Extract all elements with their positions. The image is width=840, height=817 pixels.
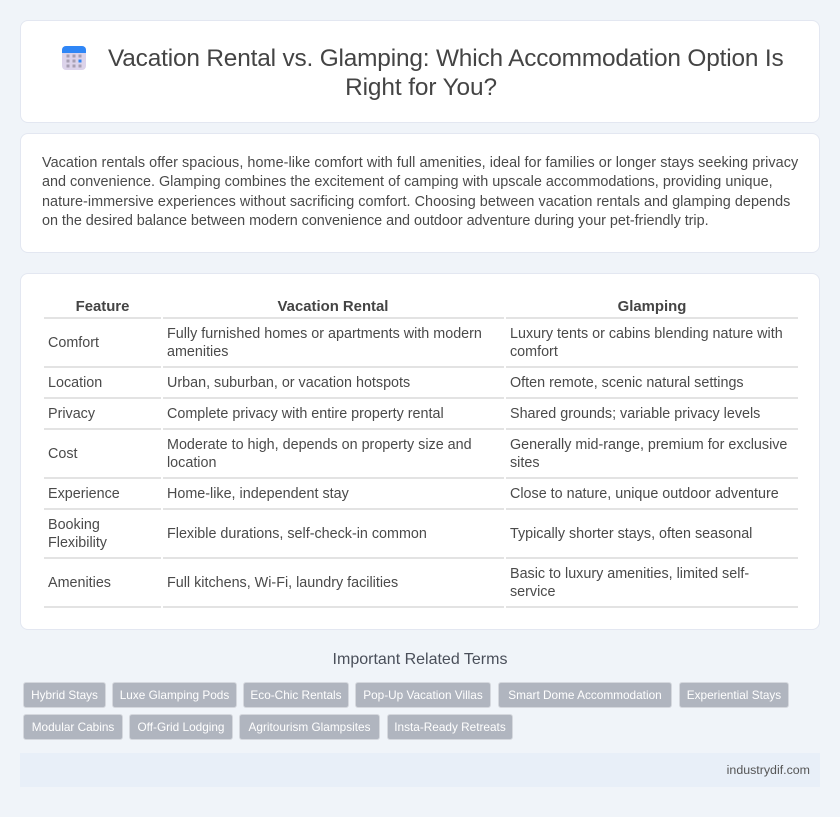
row: location: Location — [48, 374, 102, 390]
row: amenities: Basic to luxury amenities, limited self- — [510, 566, 749, 582]
row: amenities: Full kitchens, Wi-Fi, laundry facilities — [167, 574, 398, 590]
row: booking flexibility: Typically shorter stays, often seasonal — [510, 526, 752, 542]
table header row: Glamping — [618, 299, 686, 315]
tags: related terms: Off-Grid Lodging — [138, 720, 224, 734]
panel: title header — [20, 20, 820, 123]
table header row: Feature — [76, 299, 129, 315]
tags: related terms: Pop-Up Vacation Villas — [363, 688, 483, 702]
row: cost: Cost — [48, 446, 78, 462]
row: experience: Experience — [48, 486, 120, 502]
text block: introduction: nature-immersive experiences without sacrificing comfort. Choosing between vacation rentals and glamping depends — [42, 194, 790, 210]
table header row: Vacation Rental — [278, 299, 388, 315]
row: comfort: Fully furnished homes or apartments with modern — [167, 326, 482, 342]
heading: important related terms: Important Related Terms — [333, 651, 507, 668]
row: privacy: Complete privacy with entire property rental — [167, 406, 444, 422]
row: privacy — [44, 406, 798, 430]
title: Right for You? — [345, 74, 497, 101]
tags: related terms: Insta-Ready Retreats — [394, 720, 506, 734]
row: booking flexibility: Flexibility — [48, 534, 107, 550]
text block: introduction: and convenience. Glamping combines the excitement of camping with upscale accommodations, providing unique, — [42, 174, 773, 190]
tags: related terms: Luxe Glamping Pods — [120, 688, 229, 702]
tags: related terms: Eco-Chic Rentals — [250, 688, 342, 702]
row: location: Urban, suburban, or vacation hotspots — [167, 374, 410, 390]
row: comfort: Luxury tents or cabins blending nature with — [510, 326, 783, 342]
row: cost: location — [167, 454, 216, 470]
text block: introduction: on the desired balance between modern convenience and outdoor adventure during your pet-friendly trip. — [42, 213, 709, 229]
row: experience: Home-like, independent stay — [167, 486, 349, 502]
row: cost: Generally mid-range, premium for exclusive — [510, 436, 787, 452]
row: comfort: comfort — [510, 344, 558, 360]
row: amenities: service — [510, 584, 555, 600]
row: comfort: Comfort — [48, 334, 99, 350]
title — [108, 45, 783, 101]
panel: introduction — [20, 133, 820, 253]
row: comfort — [44, 326, 798, 368]
row: amenities — [44, 566, 798, 608]
tags: related terms: Smart Dome Accommodation — [508, 688, 662, 702]
row: booking flexibility: Flexible durations, self-check-in common — [167, 526, 427, 542]
panel: comparison table — [20, 273, 820, 630]
tags: related terms — [23, 682, 789, 740]
row: location: Often remote, scenic natural settings — [510, 374, 744, 390]
tags: related terms: Agritourism Glampsites — [249, 720, 370, 734]
row: cost: Moderate to high, depends on property size and — [167, 436, 472, 452]
text block: introduction: Vacation rentals offer spacious, home-like comfort with full amenities, ideal for families or longer stays seeking privacy — [42, 155, 798, 171]
row: booking flexibility: Booking — [48, 516, 100, 532]
tags: related terms: Hybrid Stays — [31, 688, 98, 702]
footer source: industrydif.com — [727, 763, 810, 777]
table header row — [44, 299, 798, 319]
row: location — [44, 374, 798, 399]
row: privacy: Privacy — [48, 406, 95, 422]
row: booking flexibility — [44, 516, 798, 559]
footer bar — [20, 753, 820, 787]
row: cost — [44, 436, 798, 479]
icon: calendar — [62, 46, 86, 70]
row: amenities: Amenities — [48, 574, 111, 590]
text block: introduction — [42, 155, 798, 229]
row: experience: Close to nature, unique outdoor adventure — [510, 486, 779, 502]
tags: related terms: Experiential Stays — [687, 688, 781, 702]
tags: related terms: Modular Cabins — [32, 720, 114, 734]
title: Vacation Rental vs. Glamping: Which Accommodation Option Is — [108, 45, 783, 72]
row: cost: sites — [510, 454, 540, 470]
row: privacy: Shared grounds; variable privacy levels — [510, 406, 760, 422]
row: experience — [44, 486, 798, 510]
row: comfort: amenities — [167, 344, 228, 360]
